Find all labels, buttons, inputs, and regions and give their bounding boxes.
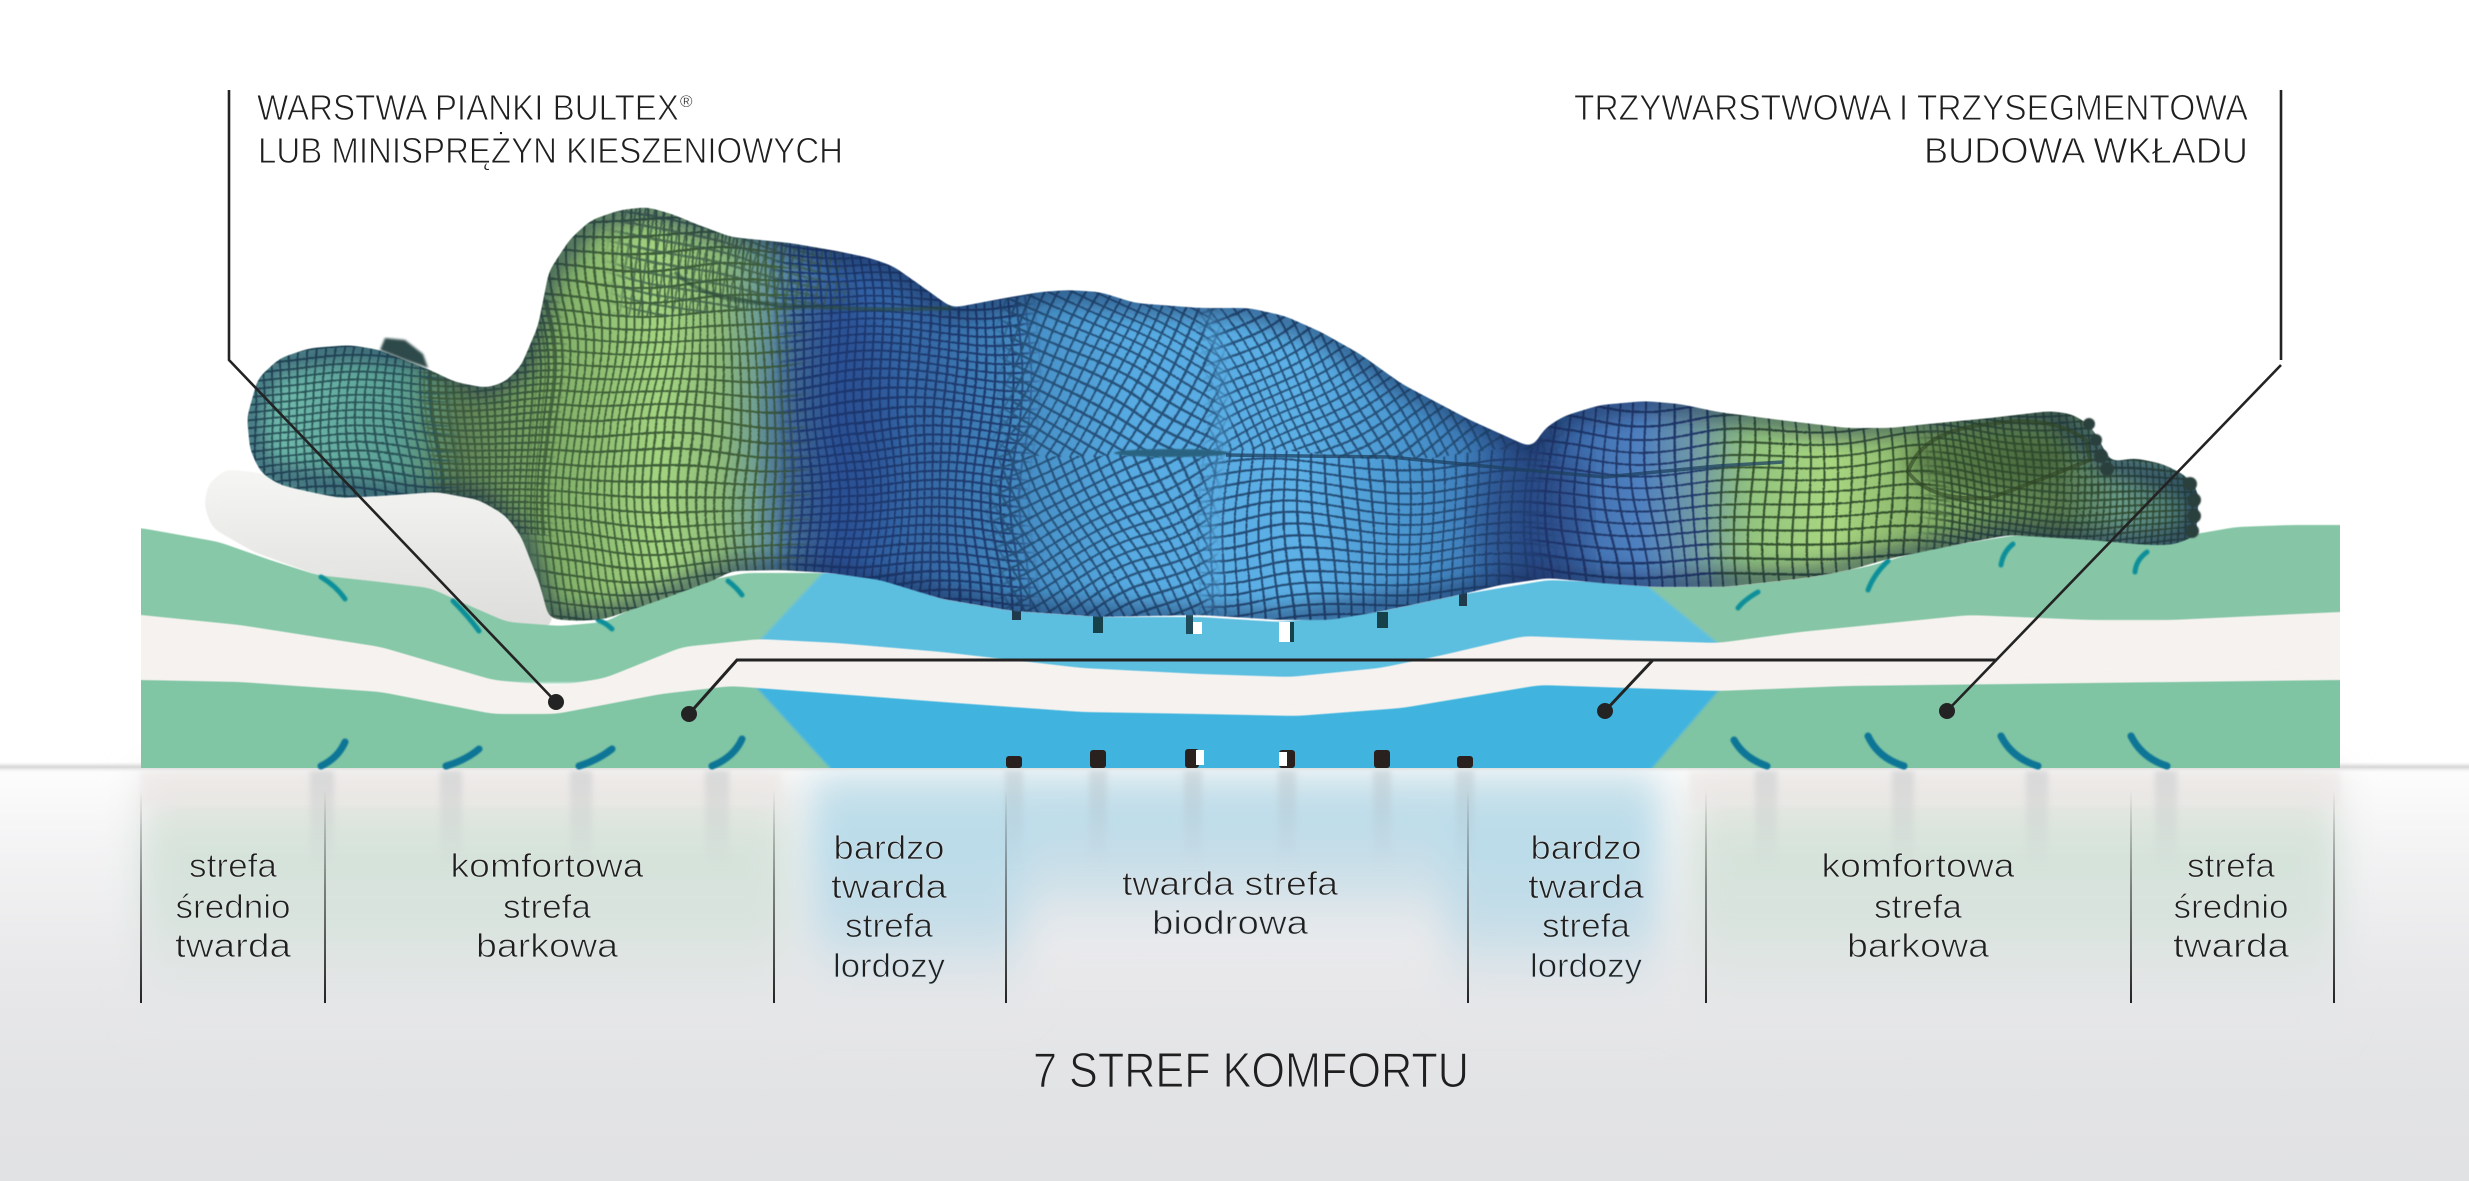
- foot outline: [1908, 421, 2090, 498]
- zone label: medium firm left: strefa: [189, 847, 278, 884]
- mattress: [141, 524, 2340, 768]
- callout dots: [548, 694, 1955, 722]
- zone label: lordosis left: [831, 829, 948, 984]
- zone label: lordosis right: lordozy: [1530, 947, 1643, 984]
- zone label: lordosis right: strefa: [1542, 907, 1631, 944]
- top layer: blue centre: [758, 572, 1720, 678]
- callout lines: [229, 90, 2281, 714]
- pillow: [204, 469, 552, 628]
- zone label: medium firm right: [2173, 847, 2290, 964]
- zone label: medium firm left: średnio: [176, 888, 290, 925]
- zone label: shoulder left: [450, 847, 644, 964]
- human body mesh: [247, 207, 2202, 622]
- zone label: shoulder left: barkowa: [476, 927, 619, 964]
- zone label: medium firm left: [175, 847, 292, 964]
- zone label: medium firm right: średnio: [2174, 888, 2288, 925]
- icon: hand at the head: [380, 338, 428, 368]
- zone label: shoulder right: [1822, 847, 2015, 964]
- zone label: lordosis left: bardzo: [834, 829, 944, 866]
- leader: horizontal with branches: [689, 660, 1997, 714]
- heading: mattress construction: BUDOWA WKŁADU: [1924, 130, 2248, 171]
- leader: left: [229, 90, 556, 702]
- zone label: shoulder right: strefa: [1874, 888, 1963, 925]
- body wireframe: [247, 208, 2198, 621]
- title: 7 comfort zones: 7 STREF KOMFORTU: [1033, 1044, 1469, 1098]
- floor line: [0, 762, 2469, 772]
- zone dividers: [140, 790, 2335, 1003]
- hip crease: [1226, 455, 1783, 477]
- mattress springs and slits: [321, 544, 2167, 766]
- zone label: lordosis left: strefa: [845, 907, 934, 944]
- zone label: shoulder right: komfortowa: [1822, 847, 2015, 884]
- zone label: lordosis right: twarda: [1528, 868, 1645, 905]
- heading: foam layer: ®: [680, 92, 693, 111]
- heading: foam layer: [257, 87, 843, 171]
- zone label: lordosis left: lordozy: [833, 947, 946, 984]
- foam channels: bottom row: [1006, 749, 1473, 768]
- hip star crease: [1114, 449, 1230, 457]
- zone label: shoulder right: barkowa: [1847, 927, 1990, 964]
- zone label: medium firm right: twarda: [2173, 927, 2290, 964]
- zone label: lordosis right: bardzo: [1530, 829, 1642, 866]
- heading: foam layer: WARSTWA PIANKI BULTEX: [257, 87, 679, 128]
- zone label: hip: [1122, 865, 1339, 941]
- top layer: green right: [1648, 524, 2340, 643]
- body edge shading: [247, 208, 2198, 620]
- zone label: lordosis left: twarda: [831, 868, 948, 905]
- bottom layer: [141, 680, 2340, 768]
- heading: mattress construction: [1574, 87, 2248, 171]
- zone label: hip: biodrowa: [1152, 904, 1309, 941]
- icon: toes: [2083, 418, 2201, 538]
- zone label: medium firm left: twarda: [175, 927, 292, 964]
- zone label: hip: twarda strefa: [1122, 865, 1339, 902]
- top layer: green left: [141, 528, 824, 684]
- dark zones: [1475, 430, 1585, 610]
- heading: mattress construction: TRZYWARSTWOWA I TRZYSEGMENTOWA: [1574, 87, 2248, 128]
- white comfort layer: [141, 612, 2340, 716]
- floor reflection of the mattress: [141, 770, 2340, 1042]
- zone label: lordosis right: [1528, 829, 1645, 984]
- heading: foam layer: LUB MINISPRĘŻYN KIESZENIOWYCH: [258, 130, 843, 171]
- foam channels: top row: [1012, 592, 1467, 642]
- zone label: shoulder left: komfortowa: [450, 847, 644, 884]
- arm crease: [675, 272, 952, 309]
- leader: right: [1947, 90, 2281, 711]
- zone label: shoulder left: strefa: [503, 888, 592, 925]
- zone label: medium firm right: strefa: [2187, 847, 2276, 884]
